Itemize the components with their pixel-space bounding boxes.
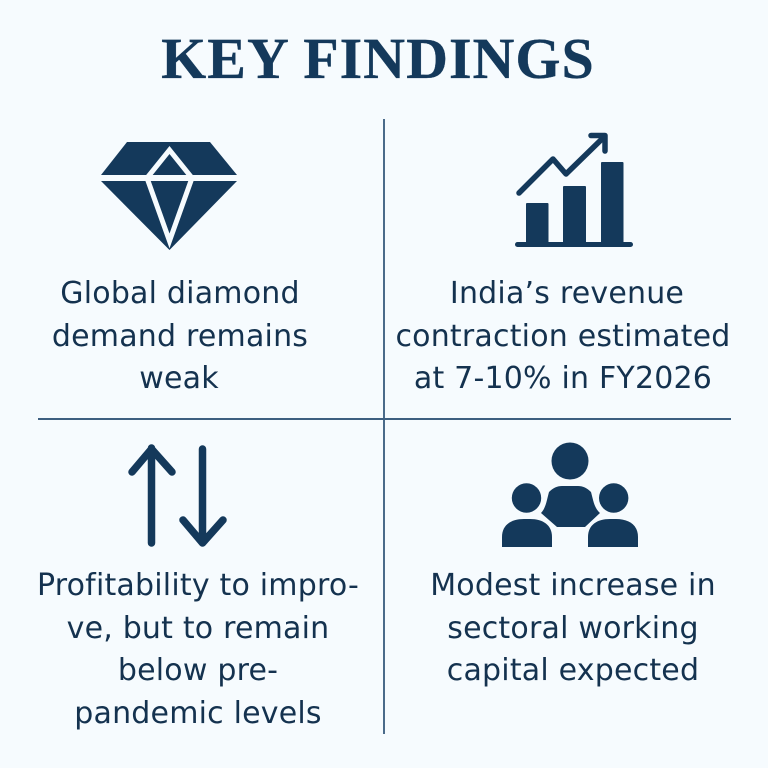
text: revenue contraction: contraction estimated xyxy=(395,318,731,354)
text: working capital: sectoral working xyxy=(447,610,699,646)
text: profitability: Profitability to impro- xyxy=(37,568,359,603)
vertical divider xyxy=(383,119,385,734)
horizontal divider xyxy=(38,418,731,420)
text: working capital: Modest increase in xyxy=(430,568,716,603)
text: working capital xyxy=(430,568,716,688)
text: revenue contraction: at 7-10% in FY2026 xyxy=(414,361,712,396)
text: revenue contraction: India’s revenue xyxy=(450,276,684,311)
icon: up and down arrows xyxy=(128,444,227,547)
text: diamond demand: Global diamond xyxy=(60,276,300,311)
text: revenue contraction xyxy=(395,276,731,396)
text: working capital: capital expected xyxy=(447,653,699,688)
text: profitability: pandemic levels xyxy=(74,696,322,730)
icon: group of people xyxy=(502,442,638,547)
text: profitability: ve, but to remain xyxy=(67,610,329,646)
text: diamond demand: weak xyxy=(139,361,219,396)
icon: rising bar chart xyxy=(515,132,633,247)
title: KEY FINDINGS xyxy=(161,26,595,91)
text: diamond demand: demand remains xyxy=(52,318,308,354)
icon: diamond xyxy=(101,142,237,250)
text: profitability xyxy=(37,568,359,730)
text: diamond demand xyxy=(52,276,308,396)
text: profitability: below pre- xyxy=(118,653,278,688)
